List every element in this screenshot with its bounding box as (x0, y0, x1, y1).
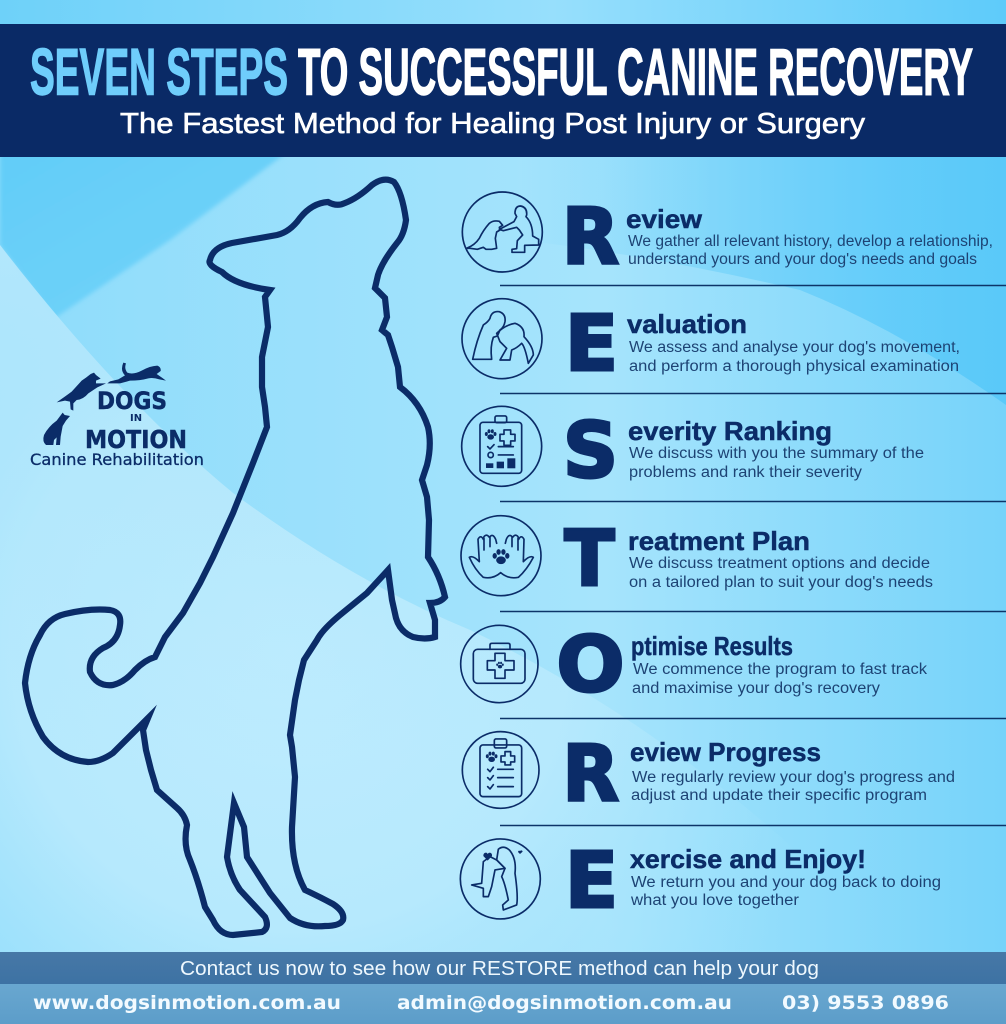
heading: reatment Plan (628, 526, 810, 556)
description (629, 555, 933, 591)
step: Review Progress (462, 730, 955, 819)
description: what you love together (630, 892, 799, 909)
heading: valuation (627, 309, 747, 339)
email: admin@dogsinmotion.com.au (397, 992, 732, 1014)
footer contact bar (0, 984, 1006, 1024)
dog outline (25, 180, 445, 935)
heading: eview (626, 204, 703, 234)
heading: everity Ranking (628, 416, 832, 446)
letter O: O (556, 621, 624, 710)
icon: medical case (461, 625, 538, 703)
icon: person examining dog (462, 299, 542, 379)
step: Optimise Results (461, 621, 927, 710)
letter T: T (564, 515, 615, 604)
title: seven steps: SEVEN STEPS (30, 34, 288, 108)
footer call to action bar: Contact us now to see how our RESTORE method can help your dog (180, 958, 819, 980)
step: Treatment Plan (461, 515, 933, 604)
logo: Dogs in Motion: MOTION (85, 425, 187, 454)
logo: Dogs in Motion: IN (130, 413, 142, 424)
description (629, 445, 924, 481)
description (629, 339, 960, 375)
letter E: E (565, 300, 618, 389)
logo wordmark: DOGS (97, 387, 167, 415)
icon: clipboard with bars (462, 406, 542, 486)
step: Severity Ranking (462, 406, 924, 496)
description: We assess and analyse your dog's movement, (629, 339, 960, 356)
title banner (0, 24, 1006, 157)
description (631, 769, 955, 804)
step: Exercise and Enjoy (460, 837, 941, 926)
description: and maximise your dog's recovery (632, 680, 880, 697)
letter S: S (563, 407, 618, 496)
description (632, 661, 927, 697)
subtitle: The Fastest Method for Healing Post Injury or Surgery (120, 108, 866, 140)
description: understand yours and your dog's needs and goals (628, 251, 977, 268)
heading: xercise and Enjoy! (630, 844, 866, 874)
heading: eview Progress (630, 737, 821, 767)
logo: Dogs in Motion (30, 363, 204, 469)
description: We discuss treatment options and decide (629, 555, 930, 572)
description: We commence the program to fast track (633, 661, 927, 678)
description (628, 233, 993, 268)
icon: person hugging dog (460, 839, 540, 919)
footer call to action bar (0, 952, 1006, 984)
logo: Dogs in Motion: Canine Rehabilitation (30, 450, 204, 469)
step: Evaluation (462, 299, 960, 389)
letter R: R (562, 193, 619, 282)
icon: dog and kneeling person (462, 192, 542, 272)
description: We discuss with you the summary of the (629, 445, 924, 462)
letter E: E (565, 837, 618, 926)
heading: ptimise Results (631, 631, 793, 661)
description: on a tailored plan to suit your dog's needs (629, 574, 933, 591)
description: adjust and update their specific program (631, 787, 927, 804)
step: Review (462, 192, 993, 282)
description: problems and rank their severity (629, 464, 862, 481)
logo dogs silhouettes (43, 363, 166, 445)
icon: hands holding paw (461, 516, 541, 596)
website: www.dogsinmotion.com.au (33, 992, 341, 1014)
letter R: R (562, 730, 619, 819)
description: We regularly review your dog's progress and (632, 769, 955, 786)
description: We gather all relevant history, develop a relationship, (628, 233, 993, 250)
description (630, 874, 941, 909)
phone: 03) 9553 0896 (782, 992, 949, 1014)
description: and perform a thorough physical examination (629, 358, 959, 375)
description: We return you and your dog back to doing (631, 874, 941, 891)
icon: clipboard with checklist (462, 732, 539, 808)
